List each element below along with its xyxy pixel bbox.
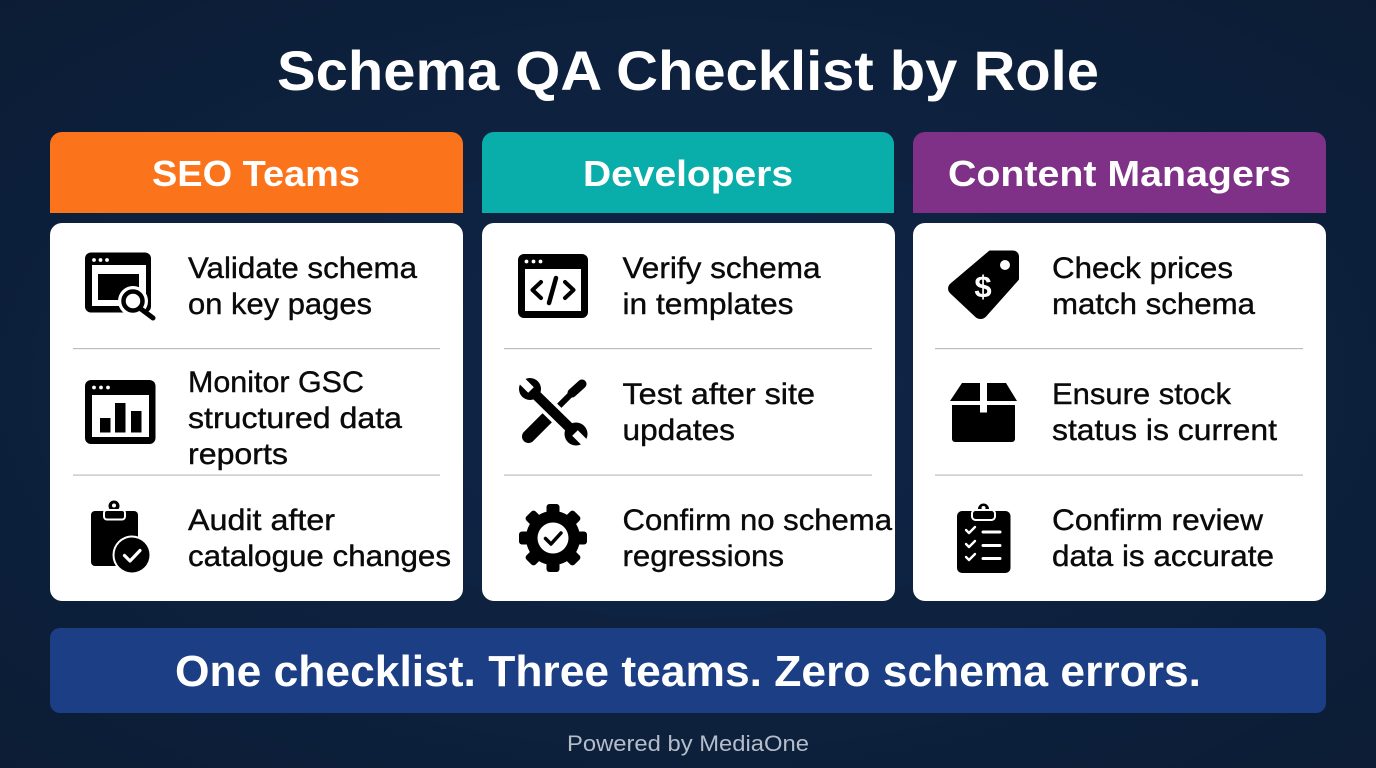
panel: Developers — [482, 132, 895, 601]
text: Ensure stock status is current: Ensure stock — [1052, 378, 1232, 411]
text: Check prices match schema: Check prices — [1052, 252, 1233, 285]
icon: clipboard with check badge — [91, 500, 152, 574]
panel: Content Managers — [913, 132, 1326, 601]
icon: price tag — [950, 252, 1018, 318]
text: Ensure stock status is current: status is current — [1052, 414, 1278, 447]
banner: tagline — [50, 628, 1326, 713]
heading: Developers — [482, 132, 894, 213]
text: Validate schema on key pages: on key pages — [188, 288, 372, 321]
text: Monitor GSC structured data reports: Monitor GSC — [188, 366, 364, 399]
icon: analytics window — [85, 380, 156, 444]
text: Monitor GSC structured data reports: structured data — [188, 402, 402, 435]
heading: Content Managers: Content Managers — [948, 153, 1291, 194]
heading: Content Managers — [913, 132, 1326, 213]
text: Audit after catalogue changes: catalogue changes — [188, 540, 451, 573]
icon: code window — [518, 254, 588, 318]
text: Monitor GSC structured data reports: reports — [188, 438, 288, 471]
text: Verify schema in templates: in templates — [622, 288, 794, 321]
icon: gear with check — [519, 504, 587, 572]
text: Confirm no schema regressions: Confirm no schema — [622, 504, 892, 537]
text: Verify schema in templates: Verify schema — [622, 252, 821, 285]
text: Validate schema on key pages: Validate schema — [188, 252, 417, 285]
icon: browser with magnifier — [85, 252, 153, 318]
footer credit: Powered by MediaOne — [567, 731, 809, 756]
icon: crossed wrench and screwdriver — [516, 375, 591, 449]
text: Test after site updates: updates — [622, 414, 735, 447]
icon: checklist clipboard — [957, 504, 1010, 573]
text: Audit after catalogue changes: Audit after — [188, 504, 335, 537]
icon: package box — [950, 383, 1017, 442]
text: Check prices match schema: match schema — [1052, 288, 1255, 321]
panel: SEO Teams — [50, 132, 463, 601]
banner: tagline: One checklist. Three teams. Zero schema errors. — [175, 647, 1201, 696]
icon: price tag: $ — [974, 269, 992, 304]
title: Schema QA Checklist by Role — [277, 39, 1099, 102]
heading: SEO Teams — [50, 132, 463, 213]
text: Test after site updates: Test after site — [622, 378, 815, 411]
text: Confirm review data is accurate: data is accurate — [1052, 540, 1274, 573]
heading: SEO Teams: SEO Teams — [152, 153, 360, 194]
heading: Developers: Developers — [583, 153, 793, 194]
text: Confirm no schema regressions: regressions — [622, 540, 784, 573]
text: Confirm review data is accurate: Confirm review — [1052, 504, 1263, 537]
